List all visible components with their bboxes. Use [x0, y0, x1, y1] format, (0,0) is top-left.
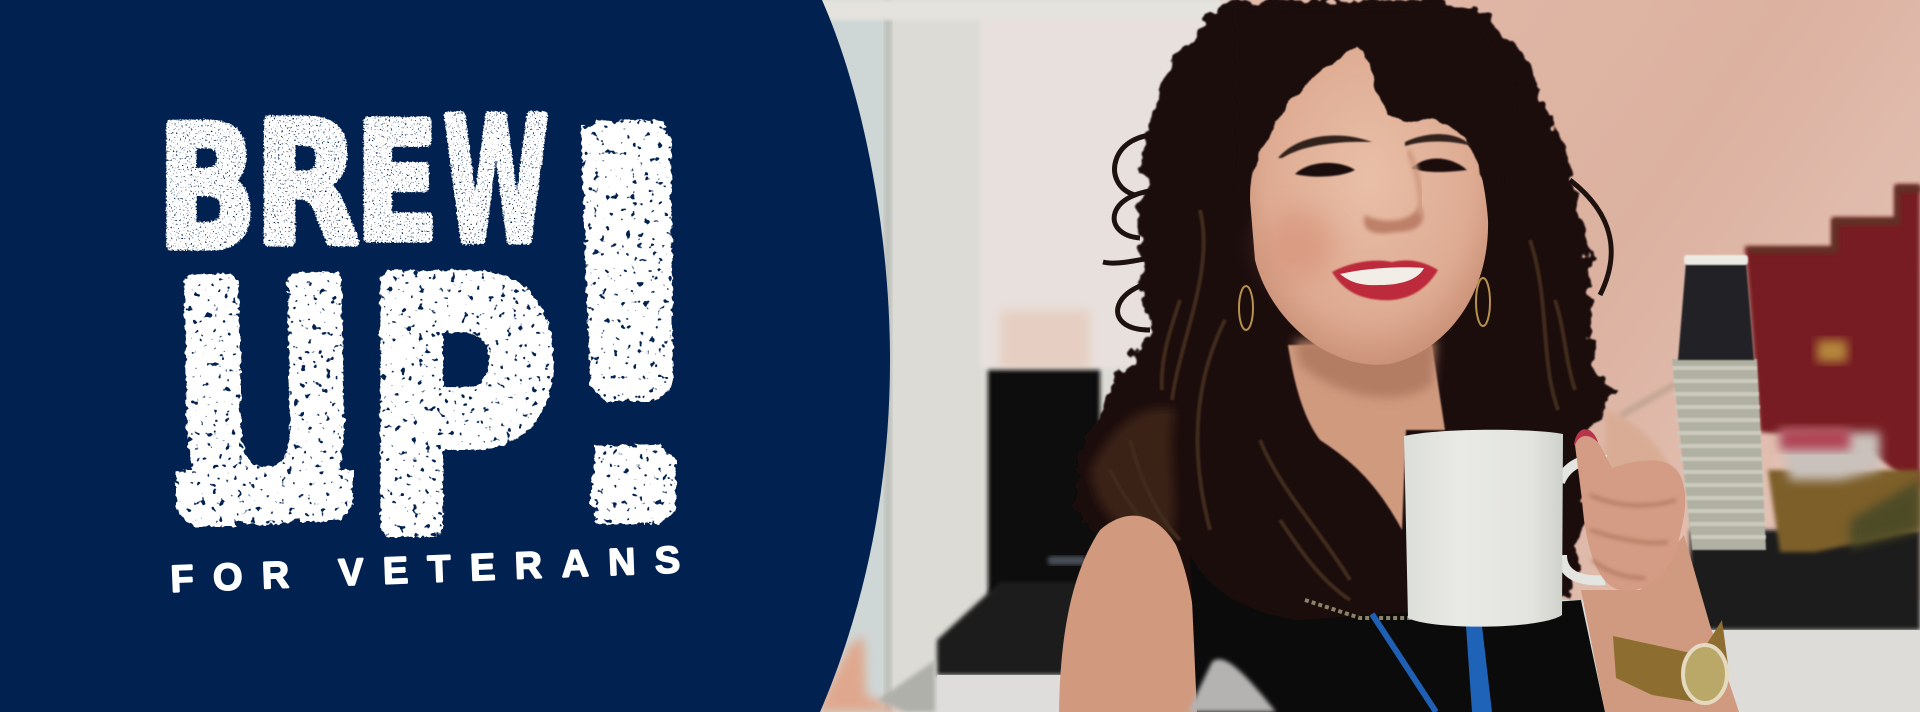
floor wedge [878, 660, 935, 712]
cup rim [1684, 255, 1748, 265]
right white cabinet [1600, 630, 1920, 712]
speaker indicator [1048, 556, 1086, 565]
loose curls [1103, 135, 1611, 330]
red nail [1574, 429, 1598, 445]
neck and chest [1288, 345, 1445, 530]
mug handle [1560, 459, 1606, 580]
right arm [1581, 535, 1739, 712]
word: BREW: B [157, 90, 257, 288]
word: BREW: E [355, 89, 439, 278]
hair strands [1110, 210, 1575, 600]
word: BREW [157, 80, 549, 288]
left eyebrow [1278, 135, 1372, 158]
black paper cup [1678, 262, 1754, 360]
left earring [1239, 286, 1253, 330]
left shoulder [1059, 516, 1198, 712]
navy panel [0, 0, 890, 712]
brooch at bottom [1188, 659, 1276, 712]
left counter [937, 582, 1100, 675]
corner fill of U [176, 470, 353, 527]
photo: woman holding mug [1059, 0, 1739, 712]
chin shadow [1295, 340, 1436, 398]
black speaker box [988, 370, 1100, 595]
nose shadow [1364, 205, 1423, 233]
right eyebrow [1405, 134, 1472, 146]
black dress [1190, 555, 1605, 712]
red stepped box [1745, 185, 1920, 490]
upper arm behind hand [1605, 410, 1672, 490]
photo background: room [800, 0, 1920, 712]
right counter [1690, 530, 1920, 630]
lips [1332, 260, 1438, 300]
letter U: U [167, 216, 363, 591]
face [1250, 42, 1488, 365]
exclamation mark: ! [545, 12, 710, 653]
sachets [1778, 432, 1880, 480]
word: BREW: W [443, 80, 549, 282]
hand [1575, 436, 1685, 591]
letter P: P [362, 211, 558, 611]
tagline: FOR VETERANS [170, 539, 681, 601]
word: BREW: R [254, 86, 360, 284]
watch [1613, 620, 1728, 703]
wall rail [1620, 378, 1680, 420]
teeth [1340, 267, 1424, 285]
paper cup stack [1672, 359, 1766, 550]
fringe [1235, 8, 1520, 215]
lanyard right [1466, 626, 1492, 712]
left lower skin [815, 636, 905, 712]
lanyard left [1372, 614, 1436, 712]
right eye [1412, 158, 1467, 172]
finger creases [1590, 495, 1676, 578]
cheek glow [1265, 210, 1335, 280]
left white cabinet [937, 675, 1080, 712]
mug [1404, 430, 1563, 627]
left eye [1295, 163, 1355, 177]
dot fill of exclamation mark [590, 444, 676, 523]
hair back [1072, 0, 1616, 629]
word: UP! [174, 118, 678, 538]
logo: Brew Up! for Veterans [165, 110, 680, 593]
nose side [1408, 150, 1421, 215]
tea box [1768, 470, 1920, 552]
gold clasp [1817, 340, 1847, 362]
right earring [1476, 278, 1490, 326]
brown hair lights [1090, 408, 1175, 550]
bar fill of exclamation mark [581, 121, 673, 401]
necklace [1305, 600, 1415, 618]
